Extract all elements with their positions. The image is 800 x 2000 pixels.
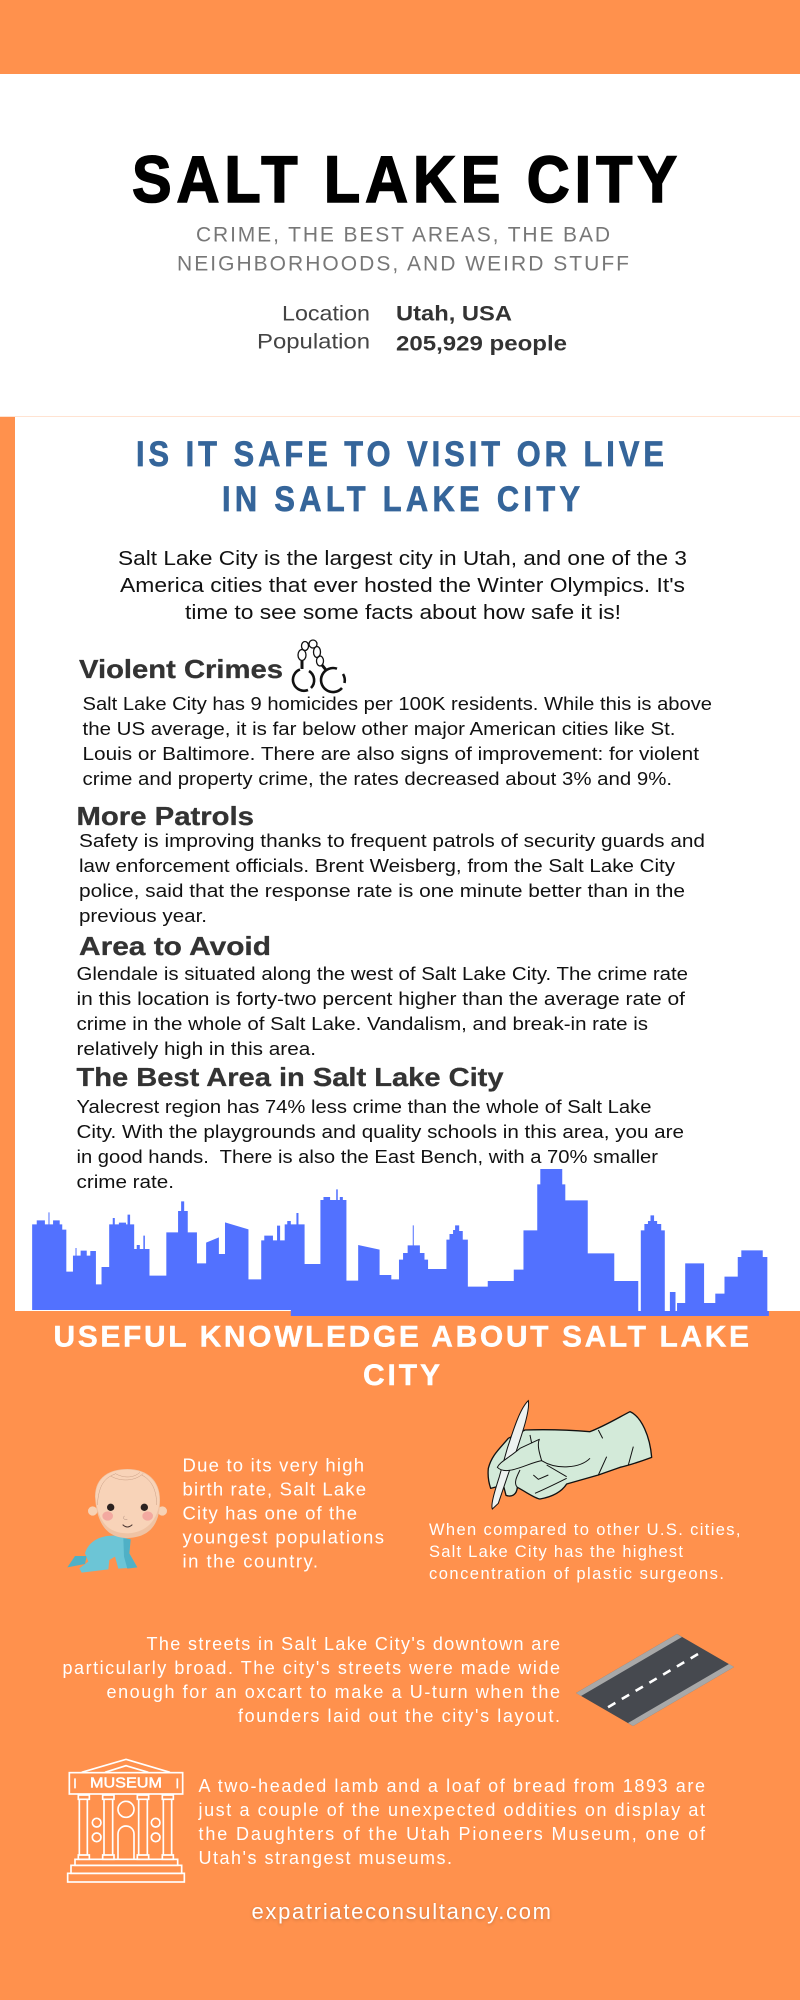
text: more patrols: law enforcement officials. Brent Weisberg, from the Salt Lake City bbox=[79, 856, 675, 876]
text: baby: in the country. bbox=[182, 1550, 318, 1572]
top orange band bbox=[0, 0, 800, 74]
text: violent crimes: Louis or Baltimore. There are also signs of improvement: for violent bbox=[82, 744, 699, 764]
text: baby bbox=[182, 1454, 384, 1572]
text: area to avoid: in this location is forty-two percent higher than the average rate of bbox=[76, 989, 686, 1009]
icon: handcuffs bbox=[293, 640, 345, 692]
location and population facts: Utah, USA bbox=[396, 302, 512, 326]
heading: useful knowledge bbox=[54, 1320, 749, 1392]
footer website: expatriateconsultancy.com bbox=[252, 1900, 551, 1925]
text: streets: The streets in Salt Lake City's downtown are bbox=[146, 1634, 560, 1654]
heading: the best area: The Best Area in Salt Lake City bbox=[76, 1062, 504, 1092]
heading: more patrols: More Patrols bbox=[76, 801, 254, 831]
text: plastic surgeons: concentration of plastic surgeons. bbox=[429, 1565, 724, 1583]
text: more patrols: previous year. bbox=[79, 906, 207, 926]
location and population facts: Location bbox=[282, 302, 370, 326]
text: museum: Utah's strangest museums. bbox=[198, 1848, 452, 1868]
text: violent crimes: Salt Lake City has 9 homicides per 100K residents. While this is above bbox=[82, 694, 712, 714]
subtitle: NEIGHBORHOODS, AND WEIRD STUFF bbox=[177, 252, 629, 276]
text: museum: A two-headed lamb and a loaf of bread from 1893 are bbox=[198, 1776, 705, 1796]
text: plastic surgeons bbox=[429, 1521, 740, 1583]
icon: baby bbox=[67, 1469, 167, 1573]
subtitle bbox=[177, 224, 629, 276]
text: area to avoid: relatively high in this area. bbox=[76, 1039, 316, 1059]
intro text: time to see some facts about how safe it is! bbox=[185, 602, 621, 624]
text: the best area: in good hands. There is also the East Bench, with a 70% smaller bbox=[76, 1147, 658, 1167]
skyline bbox=[32, 1169, 769, 1316]
text: streets: particularly broad. The city's streets were made wide bbox=[62, 1658, 560, 1678]
left orange stripe bbox=[0, 417, 15, 1317]
icon: museum building bbox=[68, 1759, 184, 1882]
text: streets: enough for an oxcart to make a U-turn when the bbox=[106, 1682, 560, 1702]
text: baby: Due to its very high bbox=[182, 1454, 364, 1476]
label: museum sign: MUSEUM bbox=[90, 1775, 162, 1792]
text: the best area: Yalecrest region has 74% less crime than the whole of Salt Lake bbox=[76, 1097, 652, 1117]
text: the best area bbox=[76, 1097, 684, 1192]
title: SALT LAKE CITY bbox=[132, 143, 677, 217]
heading: is it safe bbox=[136, 434, 664, 518]
text: area to avoid bbox=[76, 964, 688, 1059]
heading: useful knowledge: CITY bbox=[363, 1359, 440, 1392]
text: baby: City has one of the bbox=[182, 1502, 357, 1524]
icon: road bbox=[576, 1634, 734, 1726]
text: area to avoid: Glendale is situated along the west of Salt Lake City. The crime rate bbox=[76, 964, 688, 984]
text: baby: birth rate, Salt Lake bbox=[182, 1478, 366, 1500]
location and population facts bbox=[257, 302, 567, 356]
subtitle: CRIME, THE BEST AREAS, THE BAD bbox=[196, 224, 610, 246]
text: baby: youngest populations bbox=[182, 1526, 384, 1548]
panel: header bbox=[132, 143, 677, 356]
text: plastic surgeons: Salt Lake City has the highest bbox=[429, 1543, 683, 1561]
text: streets bbox=[62, 1634, 560, 1726]
text: plastic surgeons: When compared to other U.S. cities, bbox=[429, 1521, 740, 1539]
text: more patrols bbox=[79, 831, 705, 926]
location and population facts: Population bbox=[257, 330, 370, 354]
text: more patrols: police, said that the response rate is one minute better than in the bbox=[79, 881, 685, 901]
text: more patrols: Safety is improving thanks to frequent patrols of security guards and bbox=[79, 831, 705, 851]
heading: area to avoid: Area to Avoid bbox=[79, 931, 271, 961]
icon: gloved hand with scalpel bbox=[488, 1401, 652, 1509]
intro text bbox=[118, 548, 687, 624]
text: violent crimes: crime and property crime, the rates decreased about 3% and 9%. bbox=[82, 769, 672, 789]
text: the best area: crime rate. bbox=[76, 1172, 174, 1192]
location and population facts: 205,929 people bbox=[396, 332, 567, 356]
panel: useful knowledge background bbox=[0, 1311, 800, 2000]
heading: violent crimes: Violent Crimes bbox=[79, 654, 283, 684]
text: museum: the Daughters of the Utah Pioneers Museum, one of bbox=[198, 1824, 706, 1844]
text: area to avoid: crime in the whole of Salt Lake. Vandalism, and break-in rate is bbox=[76, 1014, 648, 1034]
intro text: Salt Lake City is the largest city in Utah, and one of the 3 bbox=[118, 548, 687, 570]
text: museum: just a couple of the unexpected oddities on display at bbox=[198, 1800, 705, 1820]
text: streets: founders laid out the city's layout. bbox=[238, 1706, 560, 1726]
text: museum bbox=[198, 1776, 706, 1868]
heading: is it safe: IN SALT LAKE CITY bbox=[222, 479, 580, 518]
text: violent crimes bbox=[82, 694, 712, 789]
intro text: America cities that ever hosted the Winter Olympics. It's bbox=[120, 575, 685, 597]
footer website: expatriateconsultancy.com bbox=[252, 1899, 551, 1924]
heading: is it safe: IS IT SAFE TO VISIT OR LIVE bbox=[136, 434, 664, 473]
text: the best area: City. With the playgrounds and quality schools in this area, you are bbox=[76, 1122, 684, 1142]
heading: useful knowledge: USEFUL KNOWLEDGE ABOUT SALT LAKE bbox=[54, 1320, 749, 1354]
text: violent crimes: the US average, it is far below other major American cities like St. bbox=[82, 719, 676, 739]
